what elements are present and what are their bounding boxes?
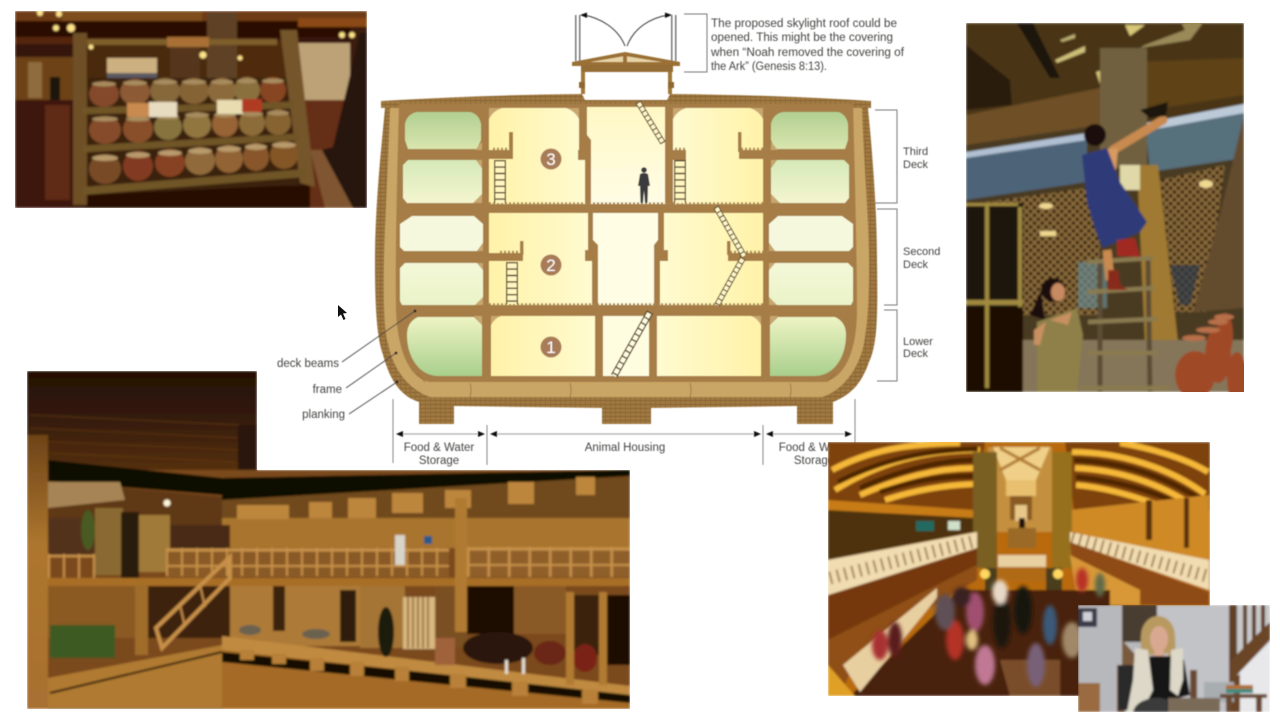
storage and housing labels: Food & Water bbox=[779, 442, 849, 454]
storage and housing labels bbox=[404, 442, 849, 467]
deck number 2 bbox=[540, 254, 562, 276]
skylight caption: the Ark” (Genesis 8:13). bbox=[711, 61, 827, 73]
side shelves and platforms bbox=[482, 132, 771, 261]
photo: ladder figures bbox=[966, 20, 1247, 404]
photo: jar storage rack bbox=[15, 10, 367, 208]
skylight caption: opened. This might be the covering bbox=[711, 32, 893, 44]
hull planking bbox=[375, 94, 877, 424]
lower deck rooms bbox=[407, 316, 846, 376]
third deck bracket bbox=[875, 110, 897, 203]
storage and housing labels: Storage bbox=[794, 455, 834, 467]
deck labels: Second bbox=[903, 246, 940, 258]
skylight caption: The proposed skylight roof could be bbox=[711, 18, 897, 30]
deck surface pegs bbox=[489, 149, 771, 304]
deck beams and bulkheads bbox=[396, 104, 857, 382]
lower deck bracket bbox=[877, 310, 897, 381]
third deck rooms bbox=[403, 107, 849, 204]
photo: ark scale model interior bbox=[27, 371, 630, 709]
deck number 3 bbox=[540, 148, 562, 170]
icon: human scale figure bbox=[638, 167, 650, 203]
second deck rooms bbox=[400, 213, 853, 305]
deck number 2: 2 bbox=[546, 256, 556, 275]
structure labels and leaders: frame bbox=[313, 384, 342, 396]
storage and housing labels: Food & Water bbox=[404, 442, 474, 454]
corner braces bbox=[473, 108, 780, 325]
deck number 1: 1 bbox=[546, 338, 556, 357]
ladders bbox=[500, 102, 744, 376]
skylight bracket bbox=[684, 14, 707, 72]
skylight roof bbox=[572, 12, 680, 94]
structure labels and leaders: planking bbox=[302, 409, 345, 421]
panel: ark cross-section diagram bbox=[277, 12, 940, 467]
storage dimension lines bbox=[393, 399, 855, 465]
skylight caption: when “Noah removed the covering of bbox=[710, 47, 905, 59]
photo: fisheye interior view bbox=[828, 442, 1210, 696]
storage and housing labels: Storage bbox=[419, 455, 459, 467]
deck labels: Third bbox=[903, 146, 928, 158]
hull frame bbox=[384, 108, 869, 397]
deck number 1 bbox=[540, 336, 562, 358]
deck labels: Deck bbox=[903, 159, 929, 171]
frame joints bbox=[417, 373, 835, 397]
deck labels bbox=[903, 146, 940, 360]
deck labels: Deck bbox=[903, 259, 929, 271]
second deck bracket bbox=[877, 209, 897, 305]
deck labels: Lower bbox=[903, 336, 933, 348]
structure labels and leaders: deck beams bbox=[277, 358, 339, 370]
storage and housing labels: Animal Housing bbox=[585, 442, 665, 454]
deck labels: Deck bbox=[903, 348, 929, 360]
structure labels and leaders bbox=[277, 310, 416, 421]
skylight caption bbox=[710, 18, 905, 73]
video: presenter webcam bbox=[1078, 605, 1270, 712]
deck number 3: 3 bbox=[546, 150, 556, 169]
icon: mouse cursor bbox=[338, 305, 347, 320]
